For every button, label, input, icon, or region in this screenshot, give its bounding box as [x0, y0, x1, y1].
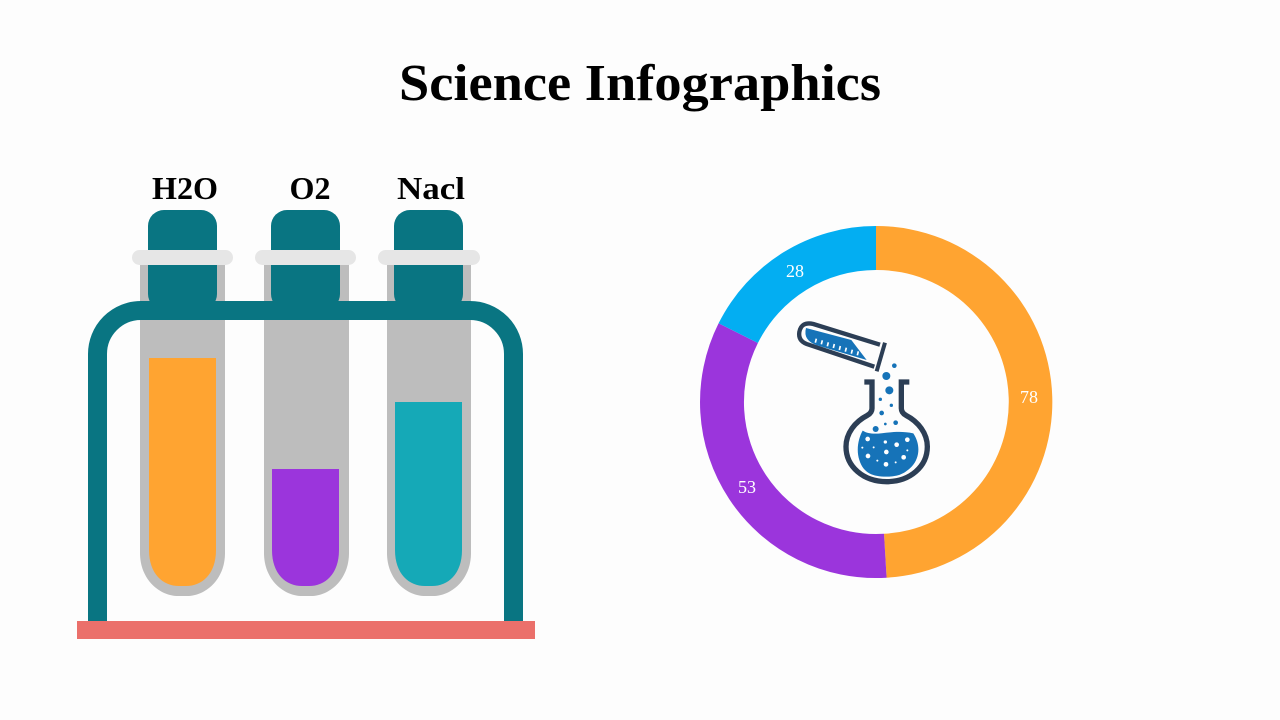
value: 78: 78 [1020, 387, 1038, 407]
value: 28: 28 [786, 261, 804, 281]
value: 53: 53 [738, 477, 756, 497]
icon: droplets [873, 363, 898, 432]
test tube rack illustration [77, 210, 535, 639]
label: Nacl: Nacl [397, 170, 465, 206]
segment: 28 [719, 226, 876, 343]
rack base [77, 621, 535, 639]
segment: 78 [876, 226, 1052, 578]
tube: H2O [132, 210, 233, 596]
icon: flask [846, 382, 927, 482]
segment: 53 [700, 323, 887, 578]
label: O2: O2 [290, 170, 330, 206]
tube: O2 [255, 210, 356, 596]
tube: Nacl [378, 210, 480, 596]
title: Science Infographics [399, 55, 881, 112]
donut chart [700, 226, 1052, 578]
icon: test tube pouring into flask [799, 323, 927, 482]
label: H2O: H2O [152, 170, 218, 206]
icon: test tube [799, 323, 885, 371]
rack frame [98, 310, 514, 622]
